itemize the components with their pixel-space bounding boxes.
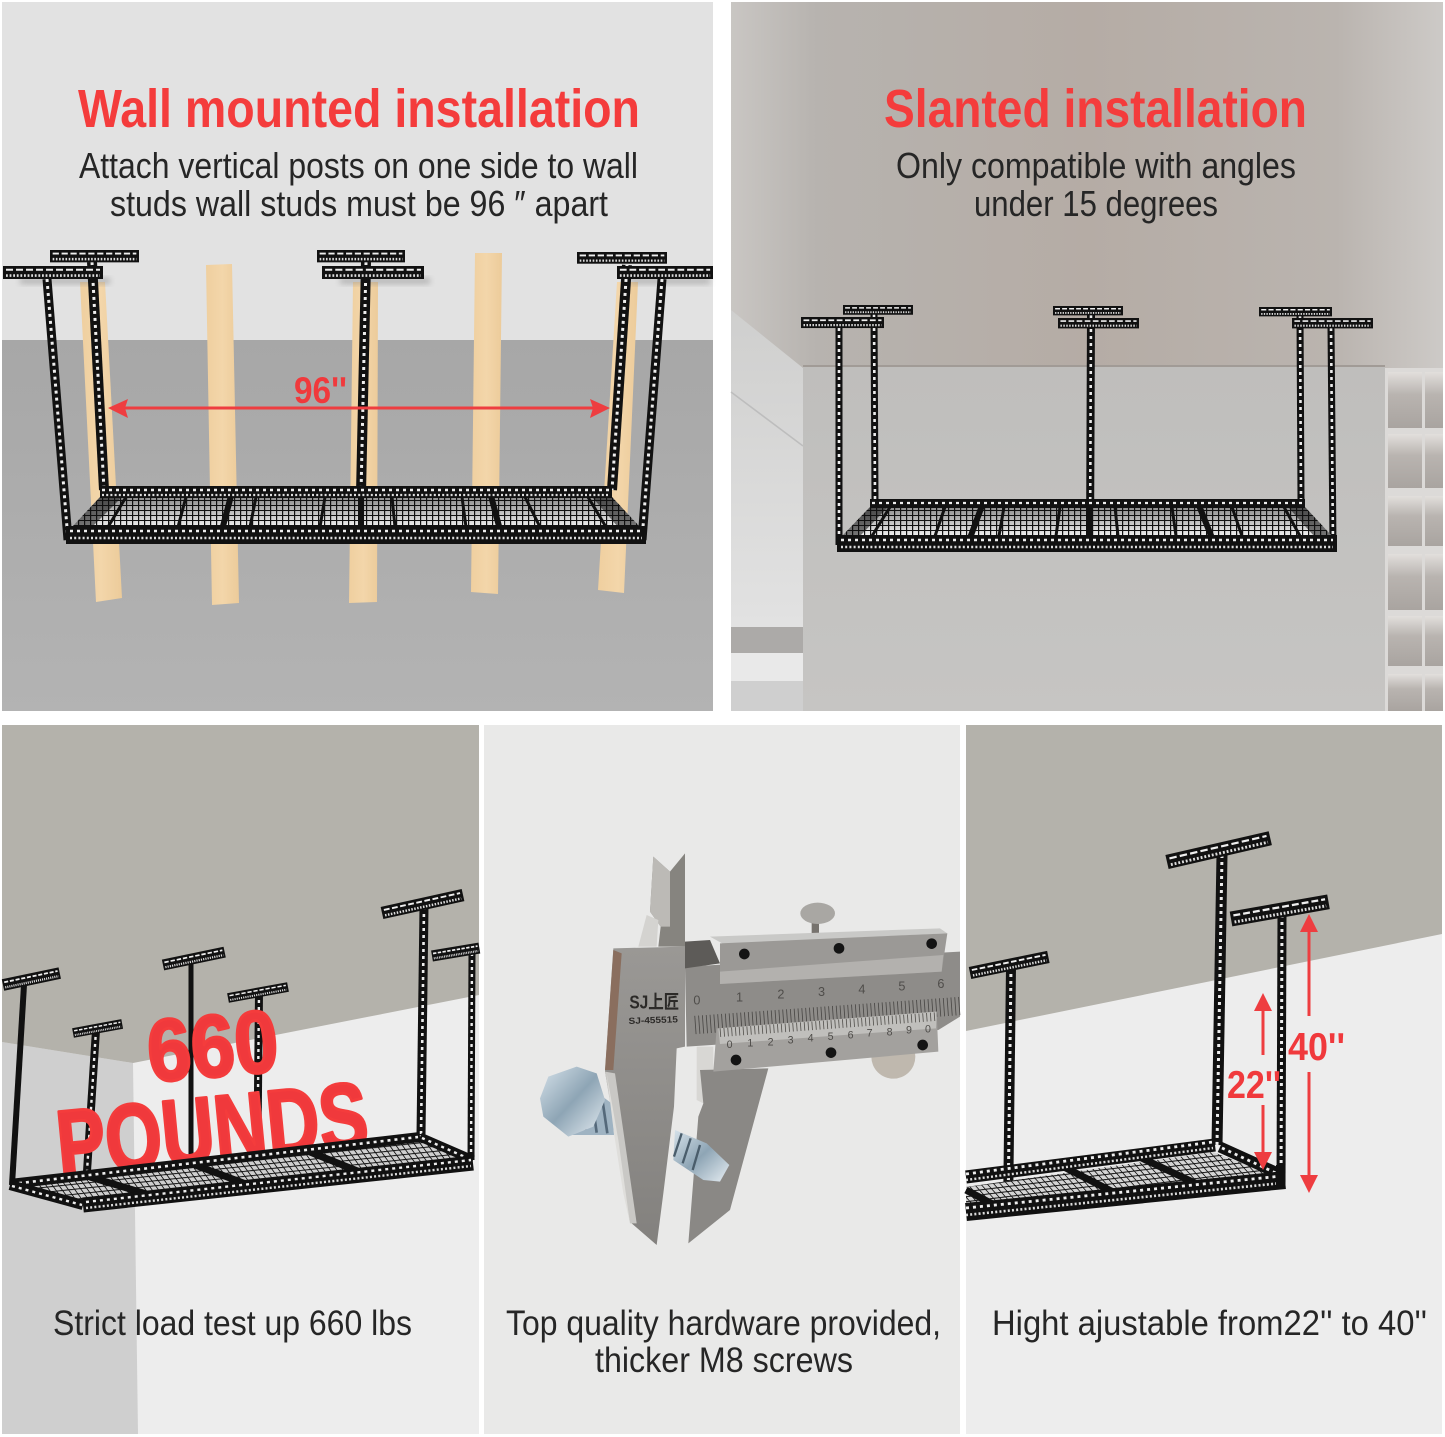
panel background — [731, 2, 1443, 711]
storage rack: side view — [966, 831, 1330, 1215]
callout: 660 pounds — [52, 991, 373, 1199]
icon: vernier caliper with M8 screw: 0 — [693, 994, 700, 1008]
icon: vernier caliper with M8 screw: 6 — [937, 977, 944, 991]
wooden wall studs — [80, 253, 638, 605]
measurement arrow: 40 inches: 40'' — [1288, 1026, 1345, 1069]
heading: wall mounted installation: Wall mounted installation — [78, 79, 640, 139]
panel background — [966, 725, 1442, 1434]
measurement arrow: 22 inches — [1227, 993, 1281, 1170]
icon: vernier caliper with M8 screw: SJ-455515 — [628, 1014, 678, 1026]
icon: vernier caliper with M8 screw: 3 — [818, 985, 825, 999]
icon: vernier caliper with M8 screw: 8 — [887, 1026, 893, 1038]
storage rack: slanted ceiling — [801, 305, 1373, 552]
icon: vernier caliper with M8 screw: SJ上匠 — [629, 992, 679, 1013]
icon: vernier caliper with M8 screw: 1 — [736, 991, 743, 1005]
panel: hardware — [484, 725, 960, 1434]
icon: vernier caliper with M8 screw — [540, 853, 960, 1245]
caption: hardware: Top quality hardware provided, — [506, 1304, 941, 1343]
caption: load test: Strict load test up 660 lbs — [53, 1304, 412, 1343]
description: wall studs — [79, 145, 638, 224]
icon: vernier caliper with M8 screw: 7 — [867, 1028, 873, 1040]
icon: vernier caliper with M8 screw: 5 — [828, 1031, 834, 1043]
panel: slanted installation — [731, 2, 1443, 711]
storage rack: wall mounted — [3, 250, 713, 544]
panel background — [484, 725, 960, 1434]
panel background — [2, 2, 713, 711]
measurement arrow: 96 inches — [108, 370, 610, 418]
panel: wall mounted installation — [2, 2, 713, 711]
callout: 660 pounds: POUNDS — [52, 1062, 373, 1199]
measurement arrow: 96 inches: 96'' — [294, 370, 347, 411]
glass block window — [1385, 368, 1443, 711]
rack shelf — [10, 1137, 473, 1208]
icon: vernier caliper with M8 screw: 1 — [747, 1038, 753, 1050]
heading: slanted installation: Slanted installation — [884, 79, 1307, 139]
icon: vernier caliper with M8 screw: 2 — [768, 1036, 774, 1048]
panel: height adjustable — [966, 725, 1442, 1434]
callout: 660 pounds: 660 — [143, 991, 282, 1101]
description: angle limit: Only compatible with angles — [896, 145, 1296, 186]
icon: vernier caliper with M8 screw: 0 — [925, 1023, 931, 1035]
caption: height range: Hight ajustable from22'' to 40'' — [992, 1304, 1427, 1343]
measurement arrow: 22 inches: 22'' — [1227, 1064, 1281, 1107]
panel: load test — [2, 725, 480, 1434]
caption: hardware: thicker M8 screws — [595, 1341, 853, 1380]
icon: vernier caliper with M8 screw: 0 — [727, 1039, 733, 1051]
caption: hardware — [506, 1304, 941, 1380]
icon: vernier caliper with M8 screw: 4 — [808, 1033, 814, 1045]
icon: vernier caliper with M8 screw: 9 — [906, 1025, 912, 1037]
icon: vernier caliper with M8 screw: 6 — [848, 1030, 854, 1042]
icon: vernier caliper with M8 screw: 4 — [858, 982, 865, 996]
rack posts and brackets — [2, 889, 480, 1203]
description: wall studs: Attach vertical posts on one side to wall — [79, 145, 638, 186]
icon: vernier caliper with M8 screw: 5 — [898, 980, 905, 994]
panel background — [2, 725, 479, 1434]
description: angle limit — [896, 145, 1296, 224]
icon: vernier caliper with M8 screw: 2 — [777, 988, 784, 1002]
description: angle limit: under 15 degrees — [974, 183, 1218, 224]
icon: vernier caliper with M8 screw: 3 — [788, 1035, 794, 1047]
measurement arrow: 40 inches — [1288, 914, 1345, 1193]
description: wall studs: studs wall studs must be 96 ″ apart — [110, 183, 608, 224]
